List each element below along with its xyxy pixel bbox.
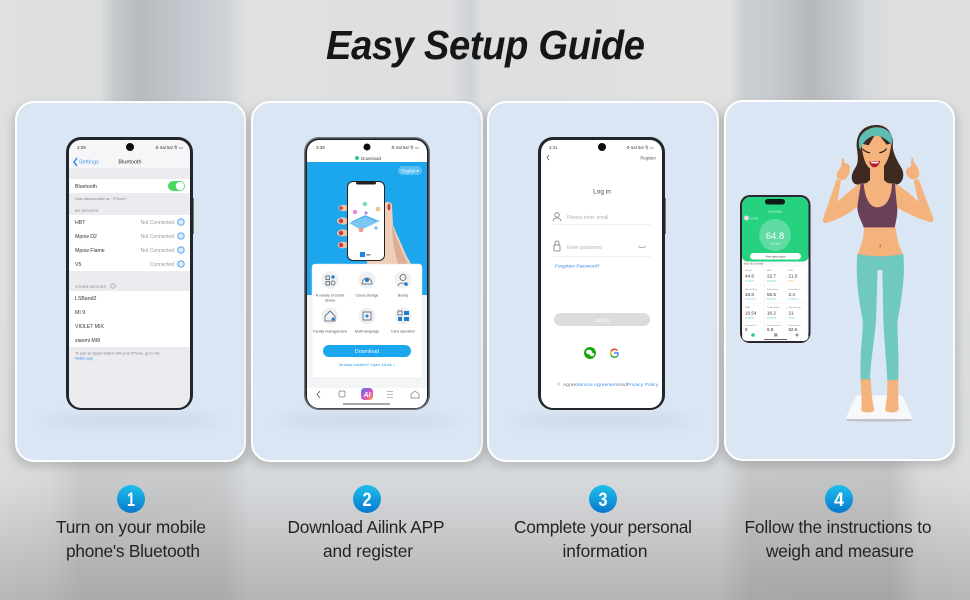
phone: Bluetooth settings screen: Now discoverable as " iPhone".: [75, 197, 128, 201]
metric cards grid: 44.8: [745, 274, 754, 278]
phone: Bluetooth settings screen: OTHER DEVICES: [75, 285, 106, 289]
icon: hand holding phone: [337, 181, 411, 264]
phone: Ailink download screen: [304, 137, 430, 410]
caption 2: Download Ailink APP: [288, 517, 444, 537]
phone: Bluetooth settings screen: Bluetooth: [75, 184, 97, 190]
metric cards grid: Higher: [788, 280, 795, 282]
caption 3: [514, 517, 692, 561]
phone: Bluetooth settings screen: Bluetooth: [118, 160, 142, 166]
phone: Bluetooth settings screen: Not Connected: [141, 220, 174, 226]
caption 4: weigh and measure: [765, 541, 914, 561]
metric cards grid: Subcutaneous: [767, 324, 782, 327]
phone: Bluetooth settings screen: Not Connected: [141, 248, 174, 254]
panel: step 2 download app: [247, 102, 487, 467]
phone: Ailink download screen: Buddy: [398, 294, 408, 298]
phone: Bluetooth settings screen: ⚙ 5al 5al 令 ▭: [155, 144, 183, 151]
metric cards grid: 16.54: [745, 310, 757, 316]
phone: Bluetooth settings screen: MI 9: [75, 310, 85, 316]
scale: [846, 395, 912, 422]
caption 4: Follow the instructions to: [744, 517, 932, 537]
arms: [823, 179, 933, 223]
phone: Bluetooth settings screen: [66, 137, 194, 410]
title: Easy Setup Guide: [326, 23, 645, 68]
illustration: woman with thumbs up on a scale: [823, 125, 933, 422]
metric cards grid: Insufficient: [745, 298, 756, 300]
phone: login screen: Log in: [593, 188, 611, 196]
phone: Bluetooth settings screen: VIOLET MIX: [75, 324, 105, 330]
email field: [553, 213, 651, 225]
step 2 badge and caption: [288, 485, 444, 561]
phone: body composition results: Body fat: 0x details: [744, 262, 764, 266]
phone: Bluetooth settings screen: 3:39: [77, 145, 86, 150]
password field: [553, 241, 651, 257]
phone: login screen: ⚙ 5al 5al 令 ▭: [626, 144, 654, 151]
button: Download: Download: [355, 349, 379, 355]
phone: Ailink download screen: device: [325, 298, 335, 302]
metric cards grid: Weight: [745, 269, 752, 272]
phone: body composition results: 0 Kg /Day: [770, 242, 781, 246]
phone: Ailink download screen: English ▾: [401, 168, 419, 174]
metric cards grid: Bone Mass: [788, 289, 800, 291]
phone: body composition results: 64.8: [766, 231, 784, 242]
badge 1: [117, 485, 145, 513]
phone: Ailink download screen: Multi-language: [355, 330, 379, 334]
phone: Bluetooth settings screen: MY DEVICES: [75, 209, 99, 213]
phone: Bluetooth settings screen: Not Connected: [141, 234, 174, 240]
leggings: [857, 254, 904, 381]
hair: [852, 125, 903, 185]
phone: Ailink download screen: 3:39: [316, 145, 325, 150]
phone: body composition results: LISITIA: [750, 218, 759, 220]
caption 1: Turn on your mobile: [56, 517, 206, 537]
sports top: [857, 183, 897, 227]
phone: body composition results: [740, 195, 810, 343]
phone: Bluetooth settings screen: xiaomi MI8: [75, 338, 100, 344]
email field: Please enter email: [567, 215, 608, 221]
metric cards grid: Visceral fat: [745, 324, 756, 327]
phone: Ailink download screen: Download: [361, 156, 382, 161]
badge 4: 4: [834, 490, 844, 511]
metric cards grid: Standard: [767, 298, 777, 300]
metric cards grid: BFR: [788, 270, 793, 272]
phone: Bluetooth settings screen: V5: [75, 262, 81, 268]
phone: Ailink download screen: Card operation: [391, 330, 415, 334]
phone: Bluetooth settings screen: Connected: [150, 262, 174, 268]
metric cards grid: 2.4: [788, 292, 795, 297]
caption 1: [56, 517, 206, 561]
badge 2: 2: [362, 490, 372, 511]
phone: Ailink download screen: Family management: [313, 330, 347, 334]
badge 2: [353, 485, 381, 513]
metric cards grid: BMR: [745, 307, 750, 309]
metric cards grid: 22.7: [767, 274, 776, 278]
icon grid: app features: [322, 272, 412, 324]
metric cards grid: Standard: [745, 316, 755, 320]
phone: login screen: 3:31: [549, 145, 558, 150]
neck and face: [863, 165, 892, 191]
legs and feet: [861, 379, 899, 412]
caption 4: [744, 517, 932, 561]
metric cards grid: 21.5: [788, 274, 798, 278]
password field: Enter password: [567, 245, 602, 251]
step 4 badge and caption: [744, 485, 932, 561]
badge 4: [825, 485, 853, 513]
metric cards grid: Muscle Rate: [745, 288, 758, 291]
panel: step 4 weigh and measure: [720, 101, 959, 466]
metric cards grid: Standard: [745, 280, 755, 282]
fists with thumbs up: [837, 158, 919, 180]
metric cards grid: Body Water: [767, 288, 779, 291]
phone: Ailink download screen: Cloud storage: [356, 294, 378, 298]
step 1 badge and caption: [56, 485, 206, 561]
metric cards grid: 6.8: [767, 327, 774, 332]
eyes: [863, 149, 887, 153]
step 3 badge and caption: [514, 485, 692, 561]
headband: [859, 127, 892, 150]
metric cards grid: Insufficient: [788, 298, 799, 300]
metric cards grid: Standard we: [788, 324, 802, 327]
metric cards grid: 5: [745, 327, 748, 332]
phone: login screen: Forgotten Password?: [555, 264, 600, 268]
smile: [869, 161, 880, 167]
phone: Bluetooth settings screen: Mpow Flame: [75, 248, 105, 254]
phone: login screen: [538, 137, 666, 410]
badge 3: [589, 485, 617, 513]
phone: body composition results: View data report: [765, 254, 786, 258]
icon: WeChat: [584, 347, 596, 359]
phone: login screen: AgreeService AgreementAndPrivacy Policy: [563, 382, 659, 387]
caption 3: information: [562, 541, 648, 561]
phone: Bluetooth settings screen: HBT: [75, 220, 86, 226]
phone: body composition results: Current Day: [768, 210, 782, 214]
metric cards grid: Standard: [767, 316, 777, 320]
badge 3: 3: [598, 490, 608, 511]
metric cards grid: BMI: [767, 270, 771, 272]
badge 1: 1: [127, 490, 135, 511]
phone: Ailink download screen: Already installed? Open AiLink >: [339, 362, 396, 367]
caption 3: Complete your personal: [514, 517, 692, 537]
metric cards grid: 16.2: [767, 310, 776, 316]
phone: Bluetooth settings screen: Settings: [79, 160, 99, 166]
bottom navigation bar: AI: [362, 392, 372, 399]
bottom navigation bar: [307, 388, 427, 408]
metric cards grid: Protein Rate: [767, 306, 780, 309]
metric cards grid: 33.8: [745, 292, 754, 297]
panel: step 1 Bluetooth: [11, 102, 250, 467]
phone: Ailink download screen: ⚙ 5al 5al 令 ▭: [391, 144, 419, 151]
metric cards grid: 62.5: [788, 327, 798, 332]
caption 1: phone's Bluetooth: [66, 541, 200, 561]
metric cards grid: 55.5: [767, 292, 776, 297]
torso: [857, 227, 903, 257]
phone: Bluetooth settings screen: Watch app.: [75, 356, 94, 360]
metric cards grid: [744, 267, 807, 332]
metric cards grid: 21: [788, 310, 794, 316]
phone: Bluetooth settings screen: LSBand2: [75, 296, 96, 302]
metric cards grid: Young: [788, 318, 795, 320]
button: Log in: [554, 313, 650, 326]
phone: Bluetooth settings screen: Mpow D2: [75, 234, 97, 240]
phone: Bluetooth settings screen: To pair an Apple Watch with your iPhone, go to the: [75, 352, 160, 356]
icon: Google: [611, 349, 618, 357]
phone: Ailink download screen: A variety of smart: [316, 294, 344, 298]
button: Download: [323, 345, 411, 357]
metric cards grid: Standard: [767, 280, 777, 282]
panel: step 3 log in: [483, 102, 723, 467]
phone: login screen: Register: [640, 156, 657, 160]
button: Log in: Log in: [594, 318, 610, 324]
caption 2: [288, 517, 444, 561]
metric cards grid: Physical age: [788, 307, 802, 309]
caption 2: and register: [323, 541, 413, 561]
